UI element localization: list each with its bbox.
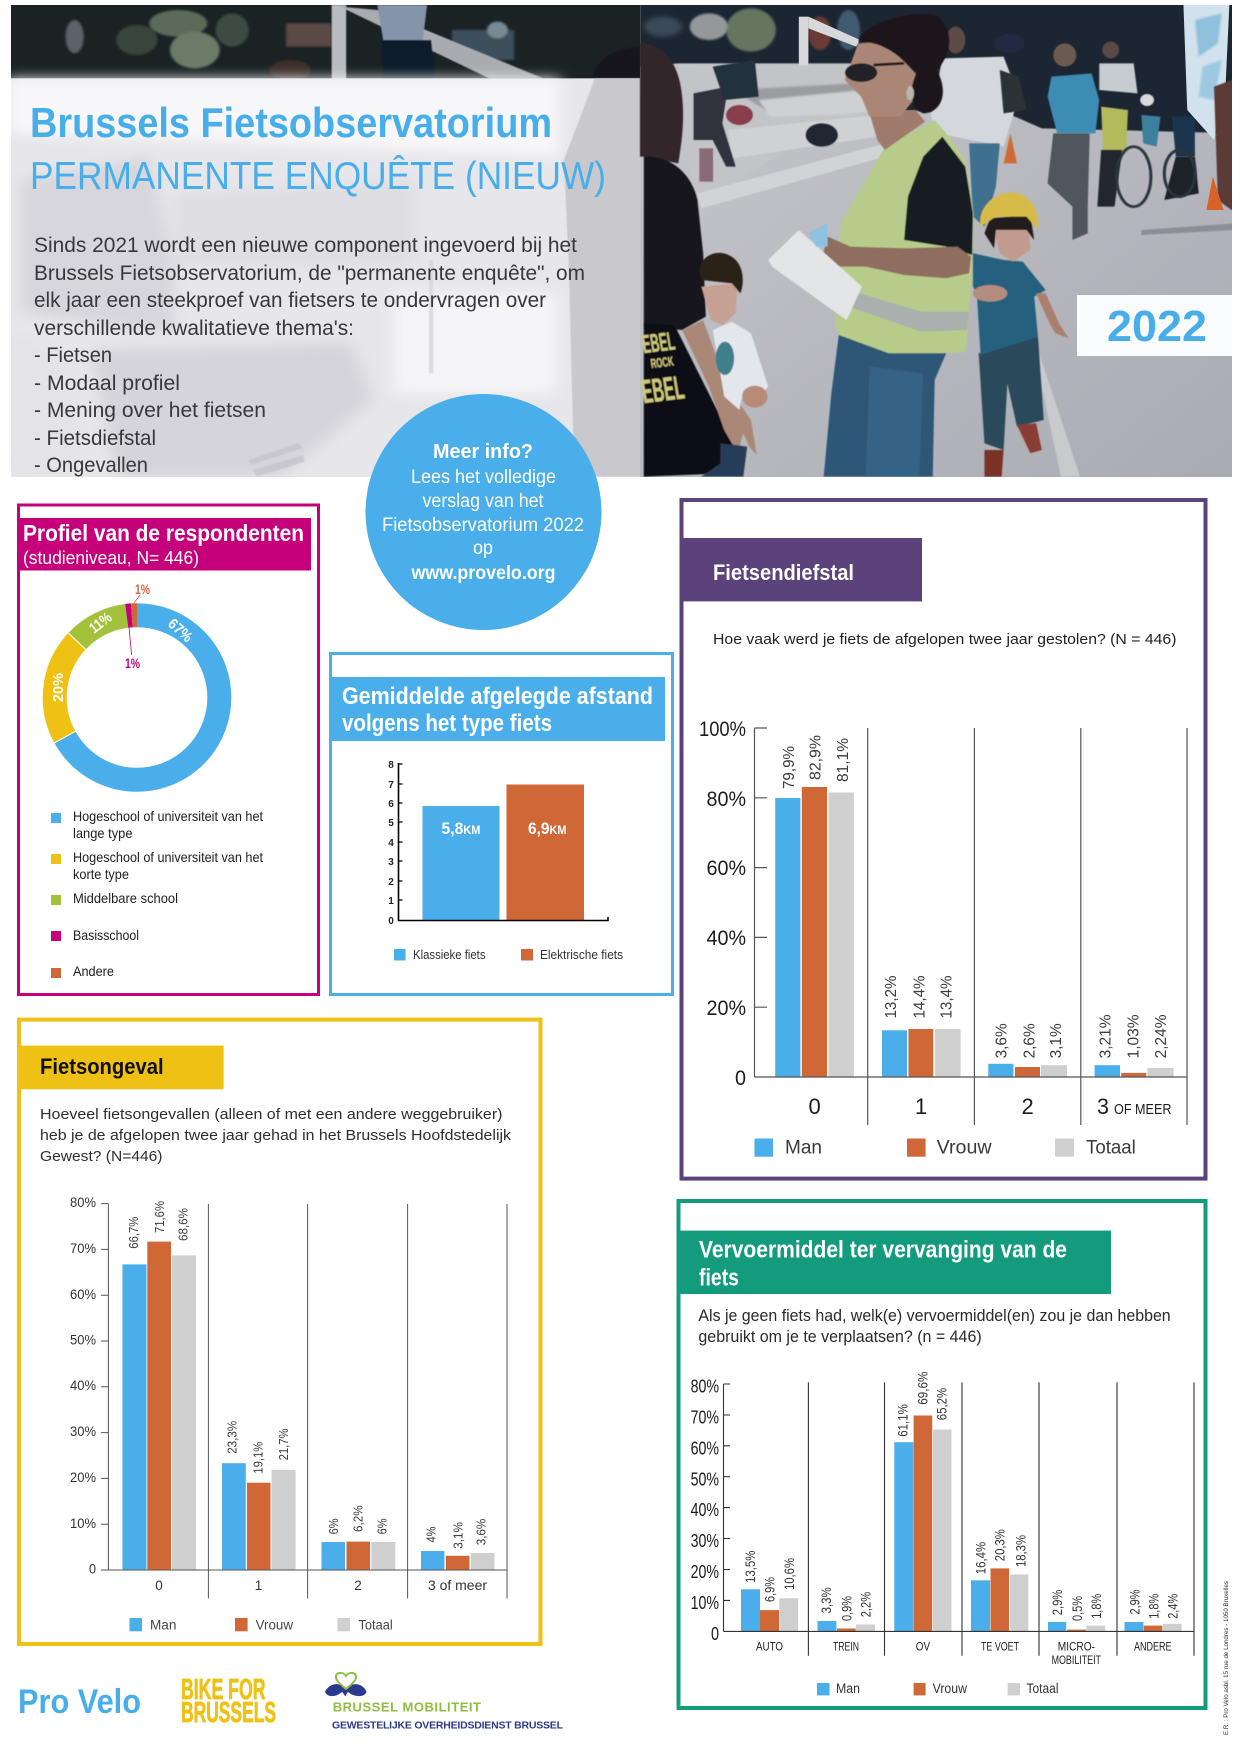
bar chart: afstand: 6 — [388, 799, 394, 810]
bar chart: vervoermiddel: 16,4% — [973, 1542, 989, 1574]
logo: brussel mobiliteit: GEWESTELIJKE OVERHEIDSDIENST BRUSSEL — [332, 1720, 564, 1732]
photo: left part behind overlay — [8, 3, 647, 478]
callout circle: meer info: op — [473, 538, 493, 559]
callout circle: meer info: Meer info? — [433, 441, 533, 463]
legend: fietsendiefstal: Vrouw — [937, 1138, 992, 1158]
bar chart: vervoermiddel: 50% — [691, 1469, 719, 1489]
bar chart: fietsendiefstal: 2,6% — [1022, 1023, 1038, 1058]
callout circle: meer info: www.provelo.org — [411, 563, 556, 584]
bar chart: fietsongeval: 6,2% — [350, 1505, 366, 1532]
bar chart: vervoermiddel: 2,4% — [1164, 1594, 1180, 1619]
bar chart: fietsendiefstal: 3,1% — [1048, 1023, 1065, 1058]
bar chart: afstand: 3 — [388, 857, 394, 868]
heading: gemiddelde afstand: Gemiddelde afgelegde afstand — [342, 683, 653, 710]
bar chart: afstand: 0 — [388, 916, 394, 927]
bar chart: vervoermiddel: 20% — [691, 1562, 719, 1582]
intro text: elk jaar een steekproef van fietsers te ondervragen over — [34, 289, 546, 312]
bar chart: fietsongeval — [70, 1195, 507, 1598]
bar chart: fietsendiefstal: 40% — [706, 927, 746, 950]
bar chart: vervoermiddel: 65,2% — [934, 1388, 950, 1420]
bar chart: fietsendiefstal: 81,1% — [835, 738, 852, 782]
intro text: - Ongevallen — [34, 454, 148, 477]
legend: vervoermiddel: Vrouw — [933, 1681, 967, 1696]
bar chart: vervoermiddel: OV — [916, 1639, 930, 1653]
bar chart: fietsongeval: 30% — [70, 1424, 96, 1439]
intro text: - Fietsen — [34, 344, 112, 367]
bar chart: vervoermiddel: MOBILITEIT — [1052, 1653, 1101, 1667]
bar chart: vervoermiddel: 60% — [691, 1438, 719, 1458]
woman left, black top with bag: EBEL — [640, 326, 677, 359]
donut chart: studieniveau: 67% — [164, 615, 196, 646]
question: fietsongeval: Gewest? (N=446) — [40, 1148, 162, 1165]
heading: vervoermiddel — [677, 1231, 1111, 1294]
bar chart: fietsendiefstal: 1,03% — [1126, 1014, 1142, 1058]
bar chart: fietsendiefstal: 14,4% — [912, 976, 928, 1018]
legend: fietstype: Klassieke fiets — [413, 948, 486, 962]
bar chart: vervoermiddel: 0,9% — [838, 1596, 854, 1621]
bar chart: fietsendiefstal: 2,24% — [1153, 1014, 1170, 1058]
bar chart: fietsendiefstal: 60% — [706, 857, 746, 880]
bar chart: vervoermiddel: 80% — [691, 1376, 719, 1396]
donut chart: studieniveau: 20% — [50, 673, 67, 702]
bar chart: fietsendiefstal: 82,9% — [808, 735, 824, 780]
bar chart: fietsongeval: 6% — [374, 1518, 389, 1534]
panel: fietsendiefstal — [680, 500, 1206, 1179]
bar chart: fietsongeval: 80% — [70, 1195, 96, 1210]
question: vervoermiddel: gebruikt om je te verplaatsen? (n = 446) — [698, 1328, 982, 1346]
small child in white shirt — [699, 253, 768, 477]
bar chart: vervoermiddel: 6,9% — [761, 1577, 777, 1602]
bar chart: fietsendiefstal: 79,9% — [781, 746, 798, 789]
logo: pro velo: Pro Velo — [18, 1683, 141, 1721]
question: vervoermiddel: Als je geen fiets had, welk(e) vervoermiddel(en) zou je dan hebben — [698, 1307, 1171, 1325]
logo: bike for brussels: BRUSSELS — [181, 1697, 276, 1729]
question: vervoermiddel — [698, 1307, 1171, 1346]
title block: PERMANENTE ENQUÊTE (NIEUW) — [30, 155, 606, 198]
bar chart: fietsendiefstal: 3,21% — [1098, 1014, 1114, 1058]
bar chart: vervoermiddel: 70% — [691, 1407, 719, 1427]
callout circle: meer info — [366, 394, 602, 630]
legend: studieniveau: korte type — [73, 866, 129, 882]
bar chart: fietsendiefstal: 0 — [808, 1094, 821, 1119]
donut chart: studieniveau — [50, 581, 219, 780]
bar chart: fietsendiefstal: 13,2% — [883, 976, 900, 1018]
bar chart: vervoermiddel: 40% — [691, 1500, 719, 1520]
bar chart: fietsongeval: 20% — [70, 1470, 96, 1485]
question: fietsongeval: heb je de afgelopen twee jaar gehad in het Brussels Hoofdstedelijk — [40, 1127, 512, 1144]
bar chart: afstand: 5 — [388, 818, 394, 829]
bar chart: fietsongeval: 1 — [255, 1578, 262, 1593]
bar chart: fietsongeval: 71,6% — [152, 1201, 167, 1233]
bar chart: fietsendiefstal — [699, 718, 1187, 1125]
legend: studieniveau: lange type — [73, 825, 133, 841]
legend: vervoermiddel: Totaal — [1026, 1681, 1058, 1696]
legend: vervoermiddel — [817, 1681, 1058, 1696]
legend: fietstype: Elektrische fiets — [540, 948, 623, 962]
bar chart: fietsendiefstal: 1 — [915, 1094, 927, 1119]
heading: profiel: Profiel van de respondenten — [23, 520, 304, 546]
callout circle: meer info: Lees het volledige — [411, 467, 556, 488]
bar chart: fietsongeval: 3,6% — [474, 1518, 488, 1545]
logo: brussel mobiliteit — [325, 1673, 564, 1732]
heading: profiel: (studieniveau, N= 446) — [23, 548, 199, 568]
legend: fietsongeval: Vrouw — [256, 1616, 294, 1632]
bar chart: fietsongeval: 3,1% — [450, 1522, 466, 1549]
intro text: - Fietsdiefstal — [34, 427, 156, 450]
intro text: Brussels Fietsobservatorium, de "permanente enquête", om — [34, 262, 585, 285]
bar chart: fietsongeval: 6% — [326, 1518, 341, 1534]
bar chart: vervoermiddel: 1,8% — [1146, 1594, 1162, 1619]
bar chart: fietsongeval: 0 — [89, 1562, 96, 1577]
legend: studieniveau: Hogeschool of universiteit van het — [73, 849, 263, 865]
bar chart: vervoermiddel: 2,9% — [1049, 1590, 1065, 1615]
heading: fietsongeval: Fietsongeval — [40, 1054, 164, 1079]
bar chart: fietsongeval: 40% — [70, 1378, 96, 1393]
bar chart: fietsongeval: 21,7% — [276, 1428, 291, 1460]
bar chart: vervoermiddel: 2,9% — [1126, 1590, 1142, 1614]
question: fietsendiefstal: Hoe vaak werd je fiets de afgelopen twee jaar gestolen? (N = 446) — [713, 631, 1176, 648]
logo: bike for brussels — [181, 1674, 276, 1729]
bar chart: vervoermiddel: 10% — [691, 1593, 719, 1613]
bar chart: afstand: 1 — [388, 896, 394, 907]
intro text: Sinds 2021 wordt een nieuwe component ingevoerd bij het — [34, 234, 577, 257]
legend: fietsongeval — [130, 1616, 393, 1632]
bar chart: vervoermiddel: 0 — [711, 1624, 719, 1644]
legend: fietsongeval: Man — [150, 1616, 176, 1632]
bar chart: vervoermiddel: 2,2% — [858, 1592, 874, 1617]
intro text — [34, 234, 585, 477]
photo background, blurred — [640, 0, 1241, 477]
heading: fietsongeval — [18, 1046, 224, 1089]
legend: studieniveau: Basisschool — [73, 927, 139, 943]
bar chart: fietsongeval: 66,7% — [126, 1216, 141, 1249]
bar chart: vervoermiddel: 0,5% — [1069, 1596, 1085, 1621]
callout circle: meer info: Fietsobservatorium 2022 — [382, 515, 584, 536]
legend: fietsongeval: Totaal — [358, 1616, 393, 1632]
bar chart: fietsendiefstal: 3 — [1097, 1094, 1109, 1119]
legend: fietstype — [394, 948, 623, 962]
title block: Brussels Fietsobservatorium — [30, 99, 552, 146]
logo: bike for brussels: BIKE FOR — [181, 1674, 266, 1706]
bar chart: afstand: 4 — [388, 838, 394, 849]
bar chart: afstand: 6,9KM — [528, 819, 566, 838]
icon: brussel mobiliteit heart — [325, 1673, 366, 1696]
bar chart: fietsongeval: 50% — [70, 1333, 96, 1348]
legend: fietsendiefstal: Man — [785, 1138, 822, 1158]
bar chart: fietsendiefstal: 100% — [699, 718, 746, 741]
bar chart: vervoermiddel: 10,6% — [781, 1558, 797, 1590]
publisher note: E.R. : Pro Velo asbl. 15 rue de Londres - 1050 Bruxelles — [1223, 1580, 1230, 1735]
bar chart: vervoermiddel — [691, 1372, 1194, 1667]
heading: fietsendiefstal: Fietsendiefstal — [713, 560, 854, 585]
panel: profiel van de respondenten — [18, 505, 318, 994]
panel: fietsongeval — [18, 1020, 540, 1644]
bar chart: fietsongeval: 60% — [70, 1287, 96, 1302]
heading: profiel — [18, 518, 311, 570]
bar chart: fietsendiefstal: 20% — [706, 997, 746, 1020]
photo: right part, street scene — [639, 0, 1241, 480]
intro text: - Modaal profiel — [34, 372, 180, 395]
panel: vervoermiddel ter vervanging — [677, 1201, 1206, 1708]
hero photo — [8, 0, 1241, 480]
legend: vervoermiddel: Man — [836, 1681, 860, 1696]
bar chart: vervoermiddel: 13,5% — [742, 1551, 758, 1583]
woman in safety vest — [768, 14, 974, 477]
donut chart: studieniveau: 11% — [86, 609, 115, 637]
bar chart: vervoermiddel: 1,8% — [1088, 1594, 1104, 1619]
bar chart: vervoermiddel: MICRO- — [1058, 1639, 1095, 1653]
heading: fietsendiefstal — [680, 538, 922, 601]
bar chart: fietsendiefstal: 3,6% — [994, 1023, 1010, 1058]
donut chart: studieniveau: 1% — [135, 581, 150, 597]
bar chart: vervoermiddel: 20,3% — [992, 1529, 1008, 1561]
intro text: - Mening over het fietsen — [34, 399, 266, 422]
heading: gemiddelde afstand: volgens het type fiets — [342, 710, 552, 737]
donut chart: studieniveau: 1% — [125, 655, 140, 671]
legend: studieniveau — [51, 808, 263, 979]
bar chart: afstand: 2 — [388, 877, 394, 888]
bar chart: fietsongeval: 0 — [155, 1578, 163, 1593]
bar chart: fietsendiefstal: OF MEER — [1114, 1101, 1172, 1118]
bar chart: fietsongeval: 68,6% — [176, 1208, 190, 1241]
bar chart: afstand: 7 — [388, 780, 394, 791]
legend: studieniveau: Andere — [73, 963, 114, 979]
heading: vervoermiddel: fiets — [699, 1265, 739, 1292]
bar chart: fietsongeval: 19,1% — [250, 1441, 266, 1474]
logo: brussel mobiliteit: BRUSSEL MOBILITEIT — [333, 1700, 481, 1714]
woman left, black top with bag: ROCK — [650, 354, 675, 372]
bar chart: vervoermiddel: 3,3% — [818, 1587, 834, 1613]
bar chart: fietsongeval: 4% — [424, 1526, 438, 1542]
question: fietsongeval — [40, 1106, 512, 1165]
running child with yellow helmet — [973, 193, 1069, 477]
bar chart: vervoermiddel: 18,3% — [1012, 1535, 1028, 1567]
bar chart: vervoermiddel: AUTO — [756, 1639, 783, 1653]
bar chart: vervoermiddel: 69,6% — [914, 1372, 930, 1405]
bar chart: vervoermiddel: 61,1% — [894, 1404, 910, 1437]
panel: gemiddelde afstand — [330, 654, 672, 994]
bar chart: vervoermiddel: 30% — [691, 1531, 719, 1551]
bar chart: fietsongeval: 10% — [70, 1516, 96, 1531]
bar chart: afstand: 5,8KM — [442, 819, 480, 838]
legend: fietsendiefstal: Totaal — [1086, 1138, 1136, 1158]
title block — [30, 99, 606, 198]
bar chart: afstand: 8 — [388, 760, 394, 771]
bar chart: fietsongeval: 23,3% — [224, 1420, 240, 1454]
woman left, black top with bag: EBEL — [639, 369, 687, 411]
bar chart: fietsendiefstal: 80% — [706, 788, 746, 811]
bar chart: vervoermiddel: ANDERE — [1134, 1639, 1172, 1653]
year badge: 2022 — [1107, 302, 1207, 351]
bar chart: fietsendiefstal: 2 — [1021, 1094, 1034, 1119]
bar chart: fietsongeval: 2 — [354, 1578, 362, 1593]
bar chart: fietsendiefstal: 0 — [735, 1067, 746, 1090]
bar chart: afstand — [388, 760, 608, 927]
bar chart: fietsongeval: 70% — [70, 1241, 96, 1256]
bar chart: fietsongeval: 3 of meer — [428, 1578, 488, 1593]
callout circle: meer info: verslag van het — [422, 491, 544, 512]
heading: gemiddelde afstand — [331, 677, 665, 741]
intro text: verschillende kwalitatieve thema's: — [34, 317, 354, 340]
woman left, black top with bag — [639, 43, 757, 477]
legend: studieniveau: Hogeschool of universiteit van het — [73, 808, 263, 824]
year badge — [1077, 295, 1237, 356]
bar chart: vervoermiddel: TE VOET — [981, 1639, 1019, 1653]
legend: fietsendiefstal — [754, 1138, 1136, 1158]
bar chart: fietsendiefstal: 13,4% — [938, 976, 956, 1018]
question: fietsongeval: Hoeveel fietsongevallen (alleen of met een andere weggebruiker) — [40, 1106, 502, 1123]
bar chart: vervoermiddel: TREIN — [833, 1639, 859, 1653]
heading: vervoermiddel: Vervoermiddel ter vervanging van de — [699, 1237, 1067, 1264]
legend: studieniveau: Middelbare school — [73, 890, 178, 906]
